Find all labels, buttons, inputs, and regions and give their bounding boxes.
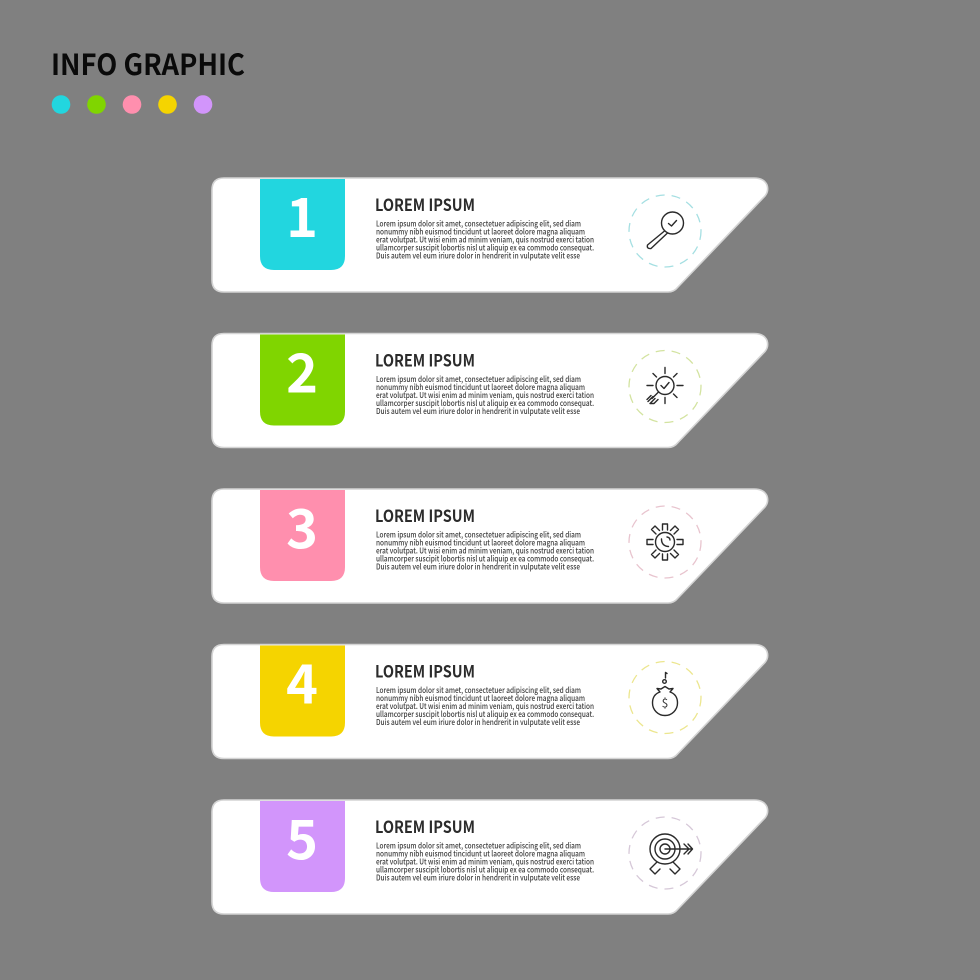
panel: step 1 bbox=[212, 174, 768, 292]
heading 5: LOREM IPSUM bbox=[375, 814, 475, 838]
icon: gear sun with phone bbox=[629, 506, 701, 578]
heading 2: LOREM IPSUM bbox=[375, 348, 475, 372]
heading 1: LOREM IPSUM bbox=[375, 192, 475, 216]
heading 3: LOREM IPSUM bbox=[375, 503, 475, 527]
number tab 4: 4 bbox=[286, 640, 318, 720]
panel: step 3 bbox=[212, 485, 768, 603]
text block 1: erat volutpat. Ut wisi enim ad minim veniam, quis nostrud exerci tation bbox=[376, 234, 594, 246]
text block 4: Lorem ipsum dolor sit amet, consectetuer adipiscing elit, sed diam bbox=[376, 685, 581, 696]
text block 4: erat volutpat. Ut wisi enim ad minim veniam, quis nostrud exerci tation bbox=[376, 701, 594, 712]
icon: money bag bbox=[629, 662, 701, 734]
icon: target with arrow bbox=[629, 817, 701, 889]
panel: step 2 bbox=[212, 330, 768, 448]
panel: step 5 bbox=[212, 796, 768, 914]
number tab 4 bbox=[260, 640, 345, 736]
legend dots bbox=[52, 95, 212, 114]
text block 5: erat volutpat. Ut wisi enim ad minim veniam, quis nostrud exerci tation bbox=[376, 856, 594, 868]
text block 2 bbox=[376, 374, 594, 417]
number tab 1 bbox=[260, 174, 345, 270]
number tab 2: 2 bbox=[286, 330, 318, 408]
text block 5: nonummy nibh euismod tincidunt ut laoreet dolore magna aliquam bbox=[376, 848, 585, 860]
text block 5: ullamcorper suscipit lobortis nisl ut aliquip ex ea commodo consequat. bbox=[376, 864, 594, 876]
text block 5 bbox=[376, 840, 594, 884]
text block 1: ullamcorper suscipit lobortis nisl ut aliquip ex ea commodo consequat. bbox=[376, 242, 594, 254]
text block 2: erat volutpat. Ut wisi enim ad minim veniam, quis nostrud exerci tation bbox=[376, 390, 594, 401]
text block 4: ullamcorper suscipit lobortis nisl ut aliquip ex ea commodo consequat. bbox=[376, 709, 594, 720]
number tab 3: 3 bbox=[286, 485, 318, 564]
number tab 5: 5 bbox=[286, 796, 318, 875]
text block 3: erat volutpat. Ut wisi enim ad minim veniam, quis nostrud exerci tation bbox=[376, 546, 594, 556]
icon: magnifier with check bbox=[629, 195, 701, 267]
text block 5: Duis autem vel eum iriure dolor in hendrerit in vulputate velit esse bbox=[376, 872, 580, 884]
text block 3: Duis autem vel eum iriure dolor in hendrerit in vulputate velit esse bbox=[376, 562, 580, 572]
heading 4: LOREM IPSUM bbox=[375, 658, 475, 682]
text block 3: ullamcorper suscipit lobortis nisl ut aliquip ex ea commodo consequat. bbox=[376, 554, 594, 564]
text block 1: Lorem ipsum dolor sit amet, consectetuer adipiscing elit, sed diam bbox=[376, 218, 581, 230]
text block 5: Lorem ipsum dolor sit amet, consectetuer adipiscing elit, sed diam bbox=[376, 840, 581, 852]
text block 1: nonummy nibh euismod tincidunt ut laoreet dolore magna aliquam bbox=[376, 226, 585, 238]
text block 2: nonummy nibh euismod tincidunt ut laoreet dolore magna aliquam bbox=[376, 382, 585, 393]
text block 1: Duis autem vel eum iriure dolor in hendrerit in vulputate velit esse bbox=[376, 250, 580, 262]
text block 4: Duis autem vel eum iriure dolor in hendrerit in vulputate velit esse bbox=[376, 717, 580, 728]
text block 2: ullamcorper suscipit lobortis nisl ut aliquip ex ea commodo consequat. bbox=[376, 398, 594, 409]
text block 4 bbox=[376, 685, 594, 728]
text block 4: nonummy nibh euismod tincidunt ut laoreet dolore magna aliquam bbox=[376, 693, 585, 704]
icon: sun with check and hand bbox=[629, 350, 701, 422]
text block 2: Duis autem vel eum iriure dolor in hendrerit in vulputate velit esse bbox=[376, 406, 580, 417]
title: INFO GRAPHIC bbox=[51, 42, 245, 84]
number tab 5 bbox=[260, 796, 345, 892]
text block 1 bbox=[376, 218, 594, 262]
number tab 3 bbox=[260, 485, 345, 581]
text block 3 bbox=[376, 530, 594, 572]
panel: step 4 bbox=[212, 640, 768, 758]
text block 2: Lorem ipsum dolor sit amet, consectetuer adipiscing elit, sed diam bbox=[376, 374, 581, 385]
number tab 1: 1 bbox=[286, 174, 318, 253]
text block 3: nonummy nibh euismod tincidunt ut laoreet dolore magna aliquam bbox=[376, 538, 585, 548]
text block 3: Lorem ipsum dolor sit amet, consectetuer adipiscing elit, sed diam bbox=[376, 530, 581, 540]
number tab 2 bbox=[260, 330, 345, 426]
icon: money bag: $ bbox=[662, 694, 668, 712]
